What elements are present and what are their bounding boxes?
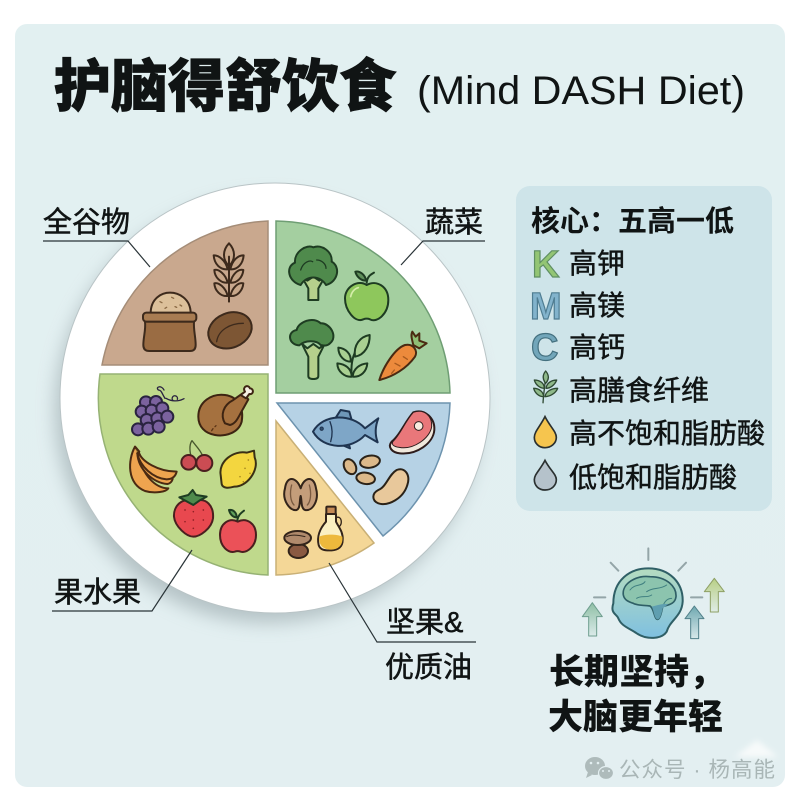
icon: herb sprout — [337, 335, 370, 377]
food icons — [130, 243, 434, 558]
label: whole grains — [43, 206, 150, 267]
icon: yellow drop — [534, 417, 556, 448]
sector: vegetables — [276, 221, 450, 393]
icon: grain sack — [143, 293, 196, 351]
text: slogan: 长期坚持， — [549, 653, 724, 692]
label: fruit — [52, 550, 192, 611]
text: high calcium: 高钙 — [569, 332, 625, 363]
watermark: 公众号 · 杨高能 — [619, 758, 775, 782]
text: high magnesium: 高镁 — [569, 290, 625, 321]
text: slogan — [548, 653, 724, 737]
icon: strawberry — [174, 490, 213, 537]
icon: cherries — [181, 441, 212, 471]
icon: banana — [130, 447, 177, 492]
label: nuts and quality oil: 优质油 — [385, 651, 472, 684]
text: high fibre: 高膳食纤维 — [569, 375, 709, 406]
sector: whole grains — [102, 221, 268, 365]
title — [54, 55, 745, 119]
plate — [55, 183, 490, 623]
icon: walnut — [284, 479, 317, 510]
icon: oil bottle — [318, 507, 343, 550]
watermark — [585, 740, 778, 782]
icon: leaf — [534, 371, 558, 403]
sector: fruit — [98, 374, 268, 575]
icon: grey drop — [534, 460, 556, 490]
text: slogan: 大脑更年轻 — [548, 698, 723, 737]
label: nuts and quality oil — [329, 563, 476, 684]
text: low saturated fat: 低饱和脂肪酸 — [569, 462, 737, 493]
icon: grapes — [132, 387, 184, 435]
label: vegetables: 蔬菜 — [425, 206, 483, 239]
icon: K: K — [532, 244, 560, 286]
icon: M: M — [530, 286, 562, 328]
icon: broccoli small — [290, 320, 333, 379]
icon: wheat — [214, 243, 244, 302]
icon: fish — [313, 410, 378, 448]
title: (Mind DASH Diet) — [417, 69, 745, 113]
text: high unsaturated fat: 高不饱和脂肪酸 — [569, 418, 765, 449]
icon: lemon — [220, 451, 256, 488]
title: 护脑得舒饮食 — [54, 55, 397, 119]
panel heading: 核心：五高一低 — [531, 205, 734, 238]
icon: coffee bean — [203, 306, 257, 355]
label: fruit: 果水果 — [54, 576, 141, 609]
icon: broccoli — [289, 247, 337, 300]
icon: wechat — [585, 757, 614, 780]
sector: protein — [277, 403, 450, 536]
icon: hazelnuts — [284, 531, 311, 558]
label: vegetables — [401, 206, 485, 265]
icon: C: C — [531, 327, 558, 369]
icon: green apple — [345, 272, 388, 320]
text: high potassium: 高钾 — [569, 248, 625, 279]
panel: five highs one low — [516, 186, 772, 511]
icon: red apple — [220, 510, 256, 552]
label: nuts and quality oil: 坚果& — [386, 607, 463, 639]
sector: nuts and oil — [276, 421, 374, 575]
icon: steak — [390, 411, 434, 453]
icon: brain with arrows — [582, 548, 724, 639]
icon: roast chicken — [198, 386, 253, 435]
icon: carrot — [379, 332, 427, 380]
icon: beans — [341, 454, 408, 504]
label: whole grains: 全谷物 — [43, 206, 130, 239]
